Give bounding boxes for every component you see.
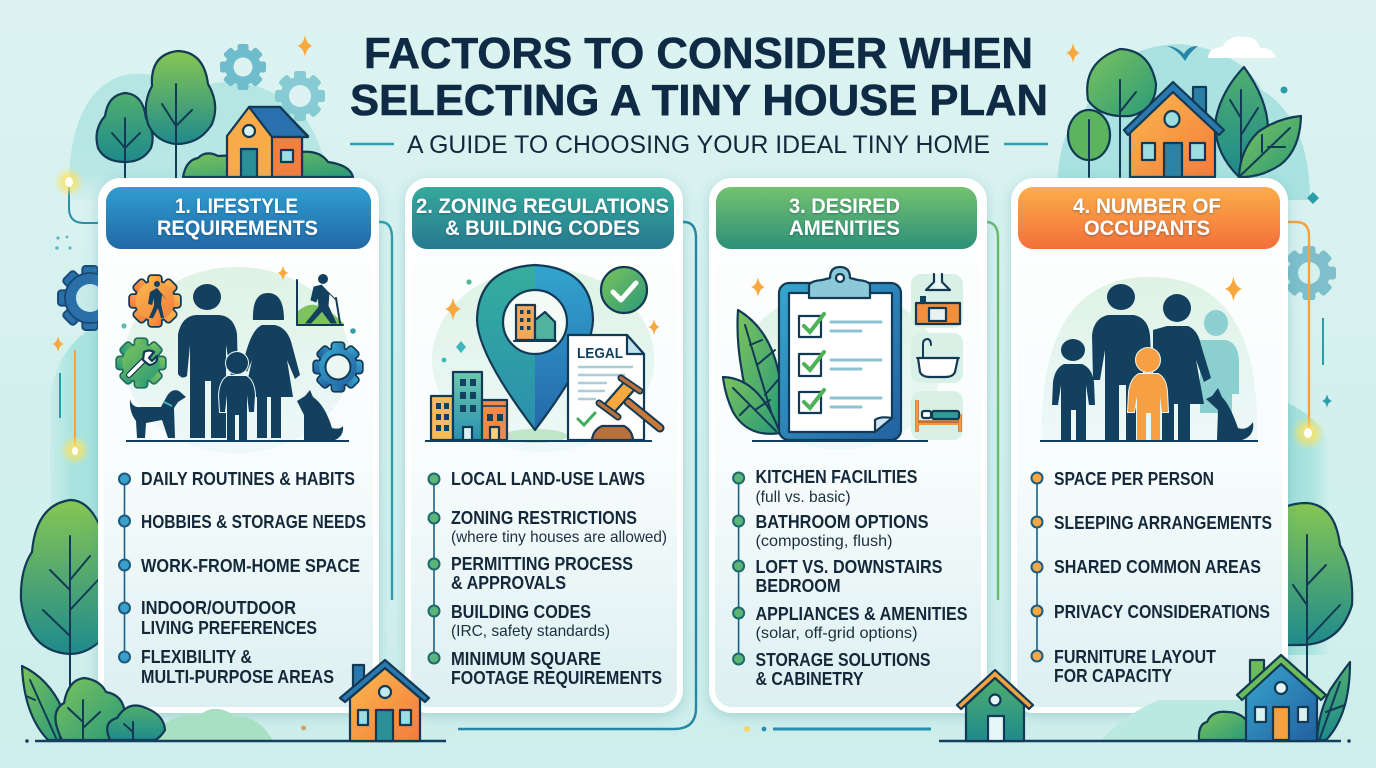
panel header [716,187,977,249]
item [733,557,942,596]
panel header: 3. DESIRED [789,195,900,218]
item: BUILDING CODES [451,602,591,622]
illustration: bottom-left ground with plants [22,666,446,743]
item: BATHROOM OPTIONS [756,512,928,532]
item: (composting, flush) [756,533,892,550]
illustration: family with hobby gears [117,266,362,453]
ground line [939,740,1341,742]
item: PRIVACY CONSIDERATIONS [1054,602,1270,622]
panel header [412,187,674,249]
item: FOOTAGE REQUIREMENTS [451,668,662,688]
icon: kitchen tile [911,274,963,328]
icon: bottom-left house [340,660,429,741]
icon: woman [1153,294,1211,440]
icon: leaf [22,666,62,740]
icon: dot [1280,86,1288,94]
icon: legal document [568,335,644,440]
checklist [799,314,881,413]
illustration: top-right landscape [1057,36,1319,204]
item [1032,647,1216,686]
icon: pale figure [1200,310,1239,413]
item: (solar, off-grid options) [756,625,918,642]
icon: sparkle [52,336,64,352]
icon: house [1124,82,1224,177]
item: MULTI-PURPOSE AREAS [141,667,334,687]
item [733,512,928,550]
item: LOCAL LAND-USE LAWS [451,469,645,489]
panel header: 1. LIFESTYLE [175,195,298,218]
illustration: top-left landscape [69,35,353,200]
icon: left dog [130,390,186,438]
item: & APPROVALS [451,573,566,593]
illustration: zoning pin, legal document and gavel [425,265,660,452]
panel header: 2. ZONING REGULATIONS [416,195,669,218]
item: ZONING RESTRICTIONS [451,508,637,528]
illustration: right big tree [1280,503,1352,700]
item: FURNITURE LAYOUT [1054,647,1216,667]
item [428,649,662,688]
bullet list: amenities [733,467,968,689]
icon: clipboard [779,267,901,440]
icon: small bush [107,706,165,740]
icon: chimney [1193,87,1206,113]
item: WORK-FROM-HOME SPACE [141,556,360,576]
icon: diamond [1307,192,1319,204]
icon: bed tile [911,391,963,440]
icon: location pin [477,265,593,430]
icon: large blue gear [58,266,122,330]
panel header: & BUILDING CODES [445,217,640,240]
item [428,508,667,546]
icon: bottom dots [744,726,766,732]
icon: gavel [592,378,660,440]
icon: sparkle [1066,43,1080,63]
item [733,650,930,689]
title: FACTORS TO CONSIDER WHEN [364,29,1033,78]
icon: pale gear [1282,246,1336,300]
panel header: OCCUPANTS [1084,217,1210,240]
item: KITCHEN FACILITIES [756,467,918,487]
icon: bush [55,678,125,740]
icon: large leaf [1215,67,1268,177]
item: (IRC, safety standards) [451,623,610,640]
item: APPLIANCES & AMENITIES [756,604,968,624]
icon: man [178,284,238,438]
icon: bathtub tile [911,333,963,383]
icon: blue gear [314,343,362,391]
icon: house [227,107,308,177]
title [350,29,1048,125]
bullet list: lifestyle [119,469,366,687]
icon: bottom-right house [1237,655,1326,741]
item: LIVING PREFERENCES [141,618,317,638]
icon: sparkle [278,266,288,280]
item: SPACE PER PERSON [1054,469,1214,489]
item: (where tiny houses are allowed) [451,529,667,546]
icon: small leaf [1239,116,1301,177]
item: FLEXIBILITY & [141,647,252,667]
connector: glow dot line [69,187,98,223]
item [428,602,610,640]
icon: small leaf [723,377,780,434]
icon: right dog [297,390,343,440]
panel header: REQUIREMENTS [157,217,318,240]
icon: left child [1052,339,1095,440]
illustration: occupants family [1040,276,1258,441]
panel: 1 lifestyle requirements [101,181,376,710]
icon: cloud [1208,36,1276,58]
connector: orange line [1288,222,1309,428]
connector: teal line [59,373,61,418]
item: BEDROOM [756,576,840,596]
ground line [1040,440,1258,442]
illustration: left big tree [21,500,110,710]
icon: check badge [601,267,647,313]
icon: dog [1206,388,1253,440]
illustration: bottom-right ground with plants [939,662,1351,743]
ground hill [503,429,567,443]
icon: woman [243,293,300,438]
icon: legal document: LEGAL [577,345,623,362]
icon: sparkles and dots [442,279,660,362]
item: LOFT VS. DOWNSTAIRS [756,557,942,577]
panel: 3 desired amenities [712,181,984,710]
icon: gear pale two [275,71,325,121]
item: HOBBIES & STORAGE NEEDS [141,512,366,532]
icon: orange child [1128,348,1168,440]
icon: glow dot [1291,416,1325,450]
bullet list: occupants [1032,469,1272,686]
item [119,598,317,638]
icon: small tree [97,93,153,178]
icon: bush [1199,712,1248,740]
icon: round tree [1087,49,1156,177]
item: INDOOR/OUTDOOR [141,598,296,618]
item: FOR CAPACITY [1054,666,1172,686]
icon: glow dot lower [60,435,90,465]
icon: tall tree [146,51,215,178]
icon: small round tree [1068,110,1110,177]
icon: bird [1167,46,1198,61]
right side decorations [1280,222,1336,655]
item [733,467,918,506]
icon: small dots [55,236,72,250]
connector: teal line [1322,318,1324,365]
left side decorations [50,167,122,530]
icon: sparkle [297,35,313,57]
ground line [35,740,446,742]
ground line [126,440,349,442]
icon: hiker gear [130,276,180,326]
icon: large leaf [738,310,780,433]
panel header [106,187,371,249]
panel: 4 number of occupants [1014,181,1285,710]
icon: small sparkle [1322,394,1332,408]
connector: orange line [74,350,76,445]
subtitle: A GUIDE TO CHOOSING YOUR IDEAL TINY HOME [407,131,990,159]
panel: 2 zoning regulations [408,181,680,710]
illustration: amenities clipboard [723,267,963,450]
ground line [425,440,652,442]
item: STORAGE SOLUTIONS [756,650,930,670]
bullet list: zoning [428,469,667,688]
item: (full vs. basic) [756,489,850,506]
panel header: 4. NUMBER OF [1073,195,1221,218]
item: PERMITTING PROCESS [451,554,633,574]
icon: bushes [183,152,353,177]
icon: gear pale one [220,44,266,90]
icon: wrench gear [117,339,165,387]
icon: glow dot [54,167,84,197]
icon: leaf [1317,662,1350,740]
icon: man [1092,284,1152,440]
item: DAILY ROUTINES & HABITS [141,469,355,489]
icon: child [219,352,255,440]
item [733,604,968,642]
icon: sparkle [1225,276,1242,302]
item: SLEEPING ARRANGEMENTS [1054,513,1272,533]
connectors between panels [378,222,998,729]
icon: bottom-middle house [957,670,1033,741]
item: SHARED COMMON AREAS [1054,557,1261,577]
item [119,647,334,687]
icon: buildings [431,372,507,440]
item: & CABINETRY [756,669,864,689]
icon: hiker picture [297,274,344,325]
panel header: AMENITIES [789,217,900,240]
icon: sparkle [751,277,765,297]
ground line [752,440,928,442]
panel header [1018,187,1280,249]
item: MINIMUM SQUARE [451,649,601,669]
item [428,554,633,593]
title: SELECTING A TINY HOUSE PLAN [350,76,1048,125]
